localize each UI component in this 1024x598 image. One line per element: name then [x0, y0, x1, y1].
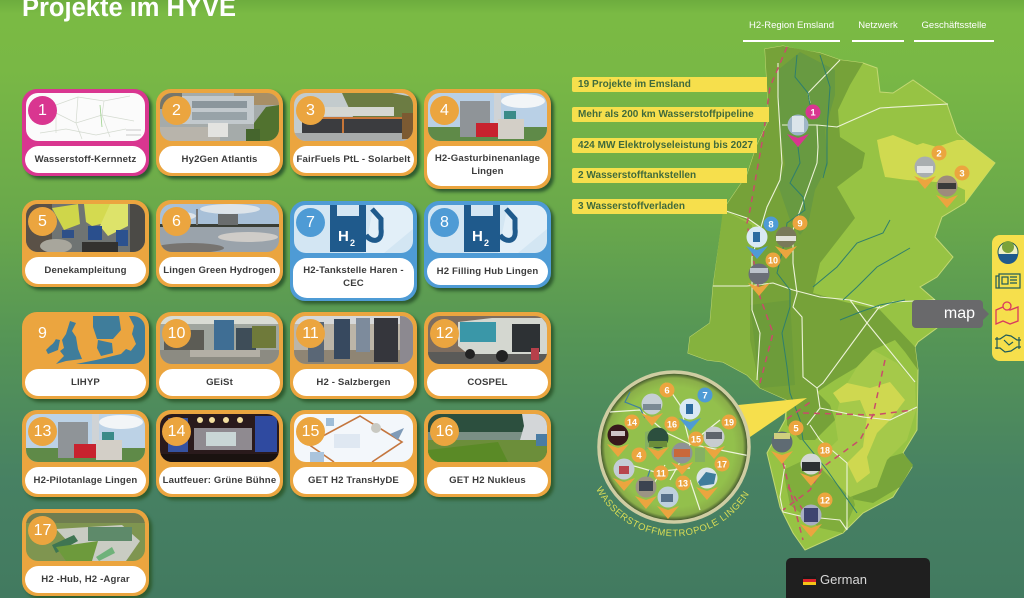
pin 15	[671, 432, 704, 475]
pin 12	[800, 492, 832, 537]
stat bar: pipeline	[572, 107, 769, 122]
card label: H2 -Hub, H2 -Agrar	[41, 574, 130, 585]
card label: FairFuels PtL - Solarbelt	[297, 154, 410, 165]
card image: turbine plant	[428, 93, 547, 141]
pin 7: 7	[702, 390, 708, 402]
pin 1: 1	[810, 108, 816, 118]
pin 13	[657, 476, 690, 519]
icon: newspaper	[996, 274, 1020, 288]
west lower strip	[688, 210, 760, 388]
project card 17	[22, 509, 149, 596]
project card 9	[22, 312, 149, 399]
project card 13	[22, 410, 149, 497]
icon: handshake	[995, 335, 1021, 352]
olive band	[723, 46, 918, 440]
project card 15	[290, 410, 417, 497]
card image: stage concert	[160, 414, 279, 462]
magnifier pointer	[738, 398, 807, 437]
card image: water reflection	[160, 204, 279, 252]
pin 11: 11	[656, 468, 666, 478]
card label	[427, 258, 548, 285]
number badge	[430, 208, 459, 237]
nav tab: Netzwerk: Netzwerk	[858, 20, 898, 31]
pin 6: 6	[664, 386, 670, 396]
card label: GEiSt	[206, 377, 233, 388]
pin 12: 12	[820, 496, 830, 506]
number badge	[28, 319, 57, 348]
number badge	[28, 417, 57, 446]
card label: H2 - Salzbergen	[316, 377, 391, 388]
card label	[159, 467, 280, 494]
rivers	[777, 55, 910, 513]
card image: map	[26, 93, 145, 141]
number badge	[296, 96, 325, 125]
pin 2	[914, 146, 946, 189]
nav tab: Netzwerk	[852, 19, 904, 42]
pin 18	[800, 442, 832, 486]
lens grey blocks	[645, 428, 705, 462]
card label	[25, 566, 146, 593]
magnifier circle: Wasserstoffmetropole Lingen	[596, 370, 751, 536]
card label	[427, 467, 548, 494]
pin 7	[679, 388, 712, 431]
south-east olive	[840, 453, 913, 503]
stat bar: filling stations: 2 Wasserstofftankstellen	[578, 170, 696, 181]
project card 3	[290, 89, 417, 176]
number badge	[162, 207, 191, 236]
number badge: 12	[436, 325, 453, 342]
stat bar: filling stations	[572, 168, 747, 183]
south yellow area	[833, 382, 905, 483]
map tooltip	[912, 300, 983, 328]
number badge: 3	[306, 102, 315, 119]
pin 5: 5	[793, 424, 799, 434]
card image: aerial with cooling tower	[428, 414, 547, 462]
number badge	[296, 319, 325, 348]
pin 15: 15	[691, 434, 701, 444]
project card 7	[290, 201, 417, 301]
stat bar: pipeline: Mehr als 200 km Wasserstoffpipeline	[578, 109, 754, 120]
card image: pilot plant	[26, 414, 145, 462]
number badge	[28, 207, 57, 236]
river-side dark patch	[750, 300, 795, 388]
number badge: 8	[440, 214, 449, 231]
card label: GET H2 TransHyDE	[308, 475, 399, 486]
dark valley	[778, 52, 835, 235]
pin 14: 14	[627, 418, 637, 428]
card label	[293, 369, 414, 396]
card label: COSPEL	[467, 377, 508, 388]
nav tab: H2-Region Emsland: H2-Region Emsland	[749, 20, 834, 31]
pin 8	[746, 216, 778, 259]
icon: map pin	[996, 302, 1018, 324]
number badge: 13	[34, 423, 51, 440]
number badge	[28, 516, 57, 545]
card image: H2 pump	[294, 205, 413, 253]
project card 5	[22, 200, 149, 287]
number badge: 9	[38, 325, 47, 342]
stat bar: electrolysis: 424 MW Elektrolyseleistung bis 2027	[578, 140, 753, 151]
pin 17	[696, 456, 730, 500]
project card 14	[156, 410, 283, 497]
number badge	[430, 319, 459, 348]
nav tab: H2-Region Emsland	[743, 19, 840, 42]
card image: truck	[428, 316, 547, 364]
stat bar: loading	[572, 199, 727, 214]
pin 3	[936, 166, 970, 208]
project card 1	[22, 89, 149, 176]
nav tab: Geschäftsstelle: Geschäftsstelle	[922, 20, 986, 31]
pin 16: 16	[667, 420, 677, 430]
card image: group of people	[294, 316, 413, 364]
number badge	[430, 417, 459, 446]
number badge: 5	[38, 213, 47, 230]
card label	[293, 258, 414, 298]
hydrogen pipeline dashes	[747, 47, 913, 540]
project card 12	[424, 312, 551, 399]
map graphic	[596, 46, 996, 551]
card image: North Sea map	[46, 316, 145, 364]
number badge: 7	[306, 214, 315, 231]
number badge	[430, 96, 459, 125]
card label	[25, 257, 146, 284]
number badge	[162, 417, 191, 446]
pin 4	[613, 448, 646, 491]
card label	[293, 146, 414, 173]
card label: Lautfeuer: Grüne Bühne	[163, 475, 276, 486]
card image: TransHyDE graphic	[294, 414, 413, 462]
roads	[713, 60, 948, 530]
number badge: 17	[34, 522, 51, 539]
pin 16	[647, 416, 680, 460]
card label	[25, 369, 146, 396]
card label: H2-Pilotanlage Lingen	[34, 475, 137, 486]
pin 14	[607, 414, 640, 457]
card label: Hy2Gen Atlantis	[182, 154, 258, 165]
language label: German	[820, 572, 867, 587]
eastern yellow area	[877, 135, 995, 203]
card image: container plant	[294, 93, 413, 141]
project card 8	[424, 201, 551, 288]
flag: Germany	[803, 579, 816, 585]
nav tab: Geschäftsstelle	[914, 19, 994, 42]
south mid green	[815, 350, 916, 497]
card label: H2-Tankstelle Haren - CEC	[303, 265, 404, 289]
pin 9	[775, 216, 808, 259]
stat bar: electrolysis	[572, 138, 757, 153]
number badge: 1	[38, 102, 47, 119]
card label: H2 Filling Hub Lingen	[437, 266, 538, 277]
card label: Wasserstoff-Kernnetz	[35, 154, 136, 165]
number badge: 15	[302, 423, 319, 440]
pin 1	[787, 104, 820, 147]
pin 19	[703, 414, 736, 459]
stat bar: projects: 19 Projekte im Emsland	[578, 79, 691, 90]
number badge	[162, 96, 191, 125]
card label	[293, 467, 414, 494]
card label: GET H2 Nukleus	[449, 475, 526, 486]
map outline	[688, 46, 995, 550]
project card 6	[156, 200, 283, 287]
stat bar: projects	[572, 77, 767, 92]
number badge	[296, 208, 325, 237]
pin 18: 18	[820, 446, 830, 456]
south lobe olive	[783, 462, 855, 533]
card image: hub rendering	[26, 513, 145, 561]
pin 11	[635, 466, 668, 509]
card label: Denekampleitung	[44, 265, 127, 276]
pin 4: 4	[636, 450, 642, 462]
magnifier circle: Wasserstoffmetropole Lingen: WASSERSTOFFMETROPOLE LINGEN	[596, 486, 749, 536]
Emsland map	[688, 46, 995, 550]
number badge	[162, 319, 191, 348]
card label	[427, 369, 548, 396]
number badge: 16	[436, 423, 453, 440]
card label	[427, 146, 548, 186]
language switcher	[786, 558, 930, 598]
icon: tree logo	[998, 241, 1018, 264]
card image: pipe hall	[160, 316, 279, 364]
pin 3: 3	[959, 168, 965, 180]
project card 10	[156, 312, 283, 399]
pin 17: 17	[717, 460, 727, 470]
pin 10	[748, 252, 780, 296]
map tooltip: map	[944, 305, 975, 322]
card label: H2-Gasturbinenanlage Lingen	[435, 153, 540, 177]
pin 2: 2	[936, 148, 942, 160]
pin 10: 10	[768, 256, 778, 266]
card image: H2 pump: 2	[350, 238, 355, 248]
side navigation	[992, 235, 1024, 361]
card label	[159, 146, 280, 173]
number badge: 2	[172, 102, 181, 119]
card label: LIHYP	[71, 377, 100, 388]
card image: plant aerial	[160, 93, 279, 141]
lens ring	[599, 372, 749, 522]
card label: Lingen Green Hydrogen	[163, 265, 276, 276]
pin 13: 13	[678, 478, 688, 488]
card image: H2 pump: H	[338, 228, 349, 245]
number badge: 4	[440, 102, 449, 119]
pin 19: 19	[724, 418, 734, 428]
project card 16	[424, 410, 551, 497]
pin 8: 8	[768, 220, 774, 230]
number badge: 10	[168, 325, 185, 342]
number badge: 6	[172, 213, 181, 230]
card label	[25, 467, 146, 494]
card label	[159, 257, 280, 284]
number badge	[28, 96, 57, 125]
curved caption	[596, 489, 752, 536]
card image: workers	[26, 204, 145, 252]
card label	[25, 146, 146, 173]
card image: H2 pump	[428, 205, 547, 253]
lens roads	[610, 383, 750, 510]
project card 4	[424, 89, 551, 189]
pin 6	[641, 382, 674, 426]
lens river	[625, 392, 650, 495]
pin 9: 9	[797, 218, 803, 230]
card image: H2 pump: 2	[484, 238, 489, 248]
card label	[159, 369, 280, 396]
project card 2	[156, 89, 283, 176]
number badge: 14	[168, 423, 185, 440]
card image: H2 pump: H	[472, 228, 483, 245]
number badge: 11	[302, 325, 319, 342]
pin 5	[771, 420, 804, 464]
project card 11	[290, 312, 417, 399]
stat bar: loading: 3 Wasserstoffverladen	[578, 201, 685, 212]
number badge	[296, 417, 325, 446]
